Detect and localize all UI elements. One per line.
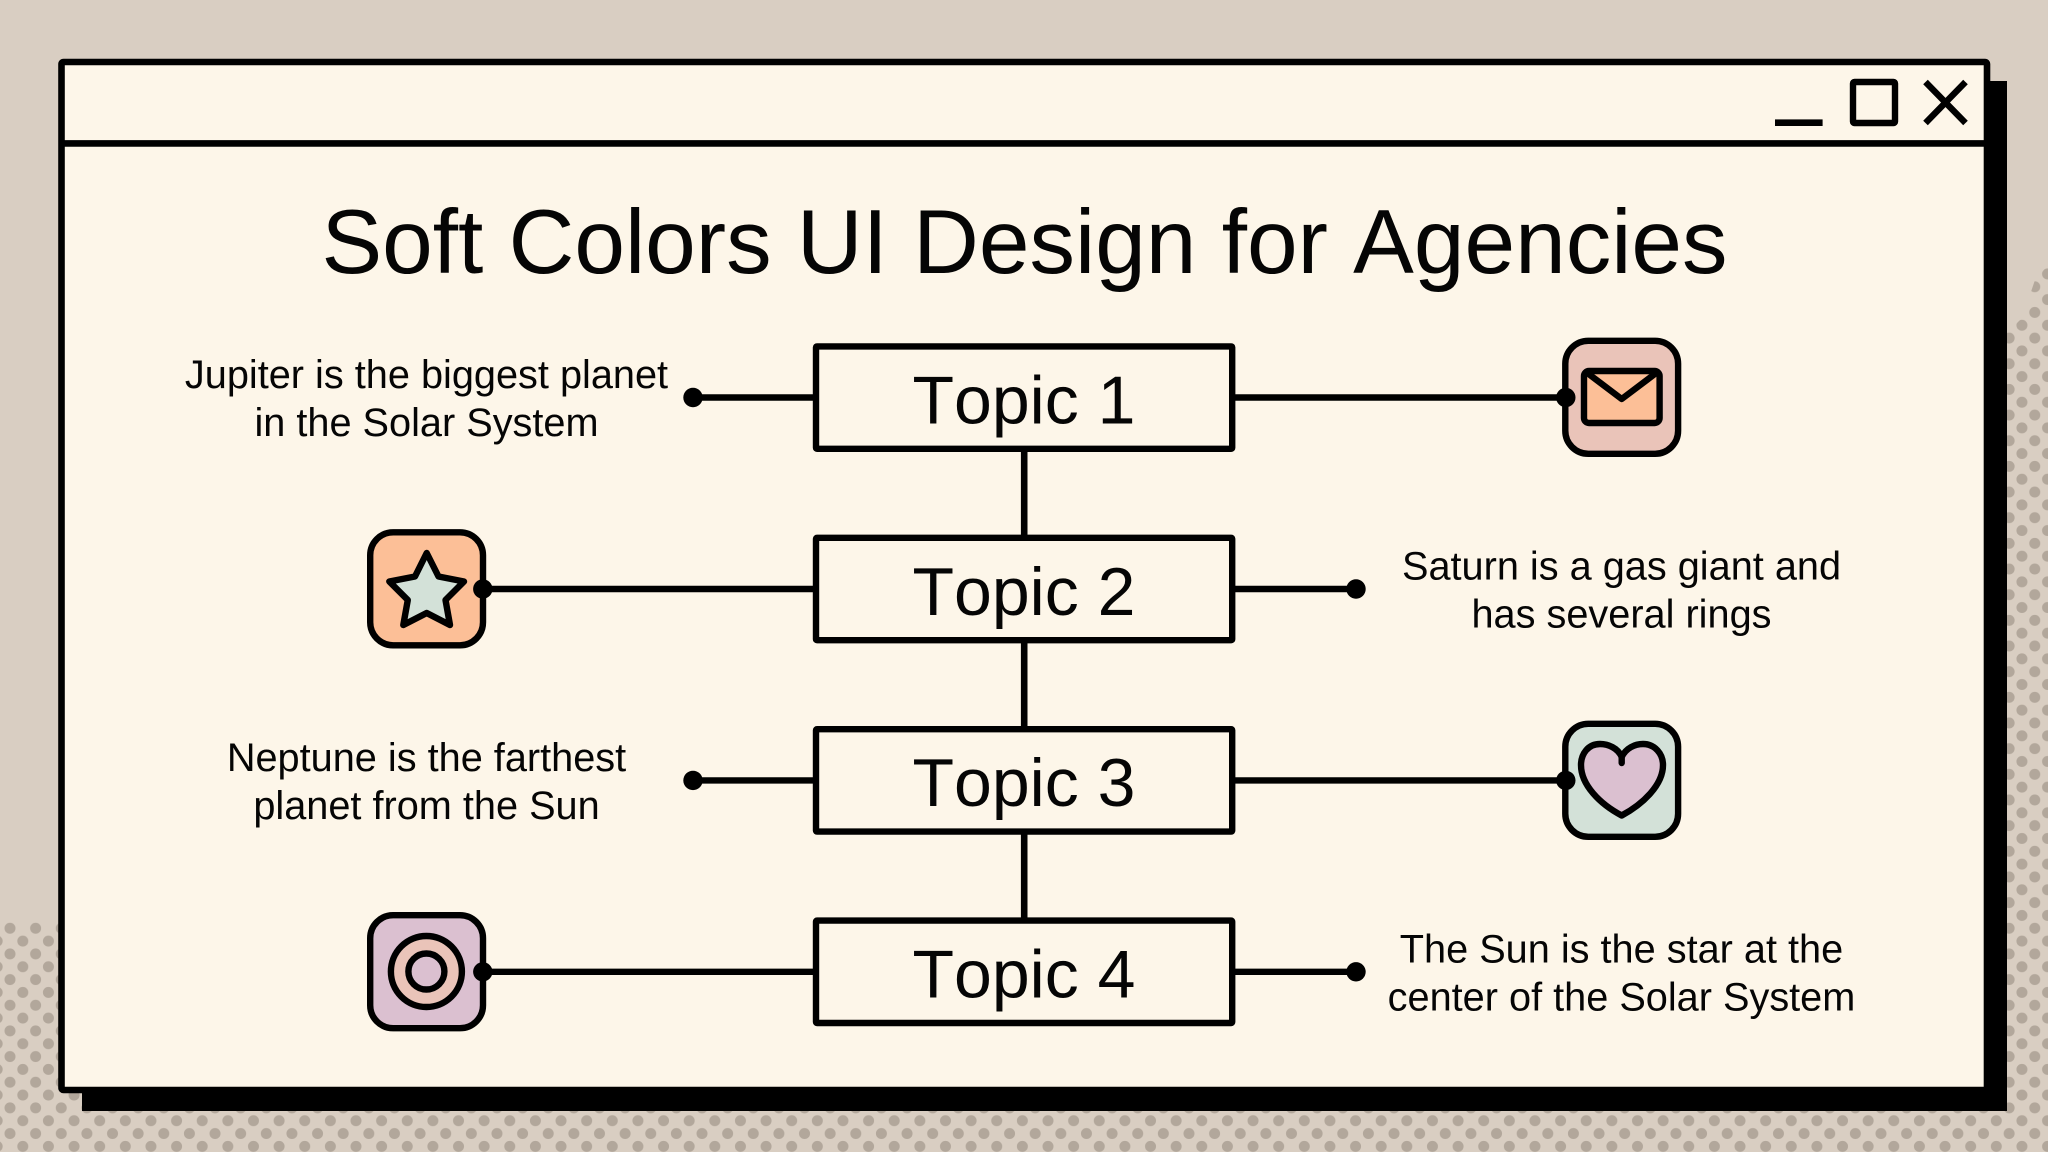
row 2 — [370, 532, 1841, 645]
icon: maximize — [1853, 82, 1895, 123]
description: Saturn — [1402, 545, 1841, 637]
description: Sun: center of the Solar System — [1388, 975, 1855, 1019]
connector line — [483, 969, 1356, 975]
start dot — [473, 579, 492, 599]
window controls — [1775, 82, 1966, 126]
start dot — [683, 771, 703, 790]
icon: minimize — [1775, 119, 1823, 126]
description: Saturn: has several rings — [1471, 593, 1772, 637]
topic 4 label: Topic 4 — [912, 937, 1136, 1013]
topic 3 label: Topic 3 — [912, 745, 1136, 821]
description: Sun — [1388, 927, 1855, 1019]
description: Jupiter: in the Solar System — [254, 401, 599, 445]
description: Jupiter — [185, 353, 668, 445]
description: Saturn: Saturn is a gas giant and — [1402, 545, 1841, 589]
topic 1 box — [816, 346, 1232, 449]
connector line — [693, 394, 1566, 401]
description: Neptune: Neptune is the farthest — [227, 736, 626, 780]
icon: sun target — [370, 915, 483, 1028]
icon: star — [370, 532, 483, 645]
row 1 — [185, 341, 1678, 454]
start dot — [683, 388, 703, 407]
topic 1 label: Topic 1 — [912, 362, 1136, 438]
description: Neptune: planet from the Sun — [253, 784, 600, 828]
connector line — [483, 586, 1356, 592]
description: Neptune — [227, 736, 626, 828]
start dot — [473, 962, 492, 982]
row 4 — [370, 915, 1855, 1028]
description: Jupiter: Jupiter is the biggest planet — [185, 353, 668, 397]
vertical connector — [1021, 450, 1027, 922]
description: Sun: The Sun is the star at the — [1400, 927, 1843, 971]
topic 3 box — [816, 729, 1232, 832]
icon: mail — [1565, 341, 1678, 454]
connector line — [693, 777, 1566, 784]
title: Soft Colors UI Design for Agencies — [321, 192, 1728, 293]
topic 2 box — [816, 538, 1232, 640]
row 3 — [227, 724, 1678, 837]
icon: heart — [1565, 724, 1678, 837]
end dot — [1556, 388, 1576, 407]
topic 4 box — [816, 921, 1232, 1023]
topic 2 label: Topic 2 — [912, 554, 1136, 630]
end dot — [1556, 771, 1576, 790]
icon: close — [1926, 82, 1966, 123]
end dot — [1346, 962, 1366, 982]
end dot — [1346, 579, 1366, 599]
